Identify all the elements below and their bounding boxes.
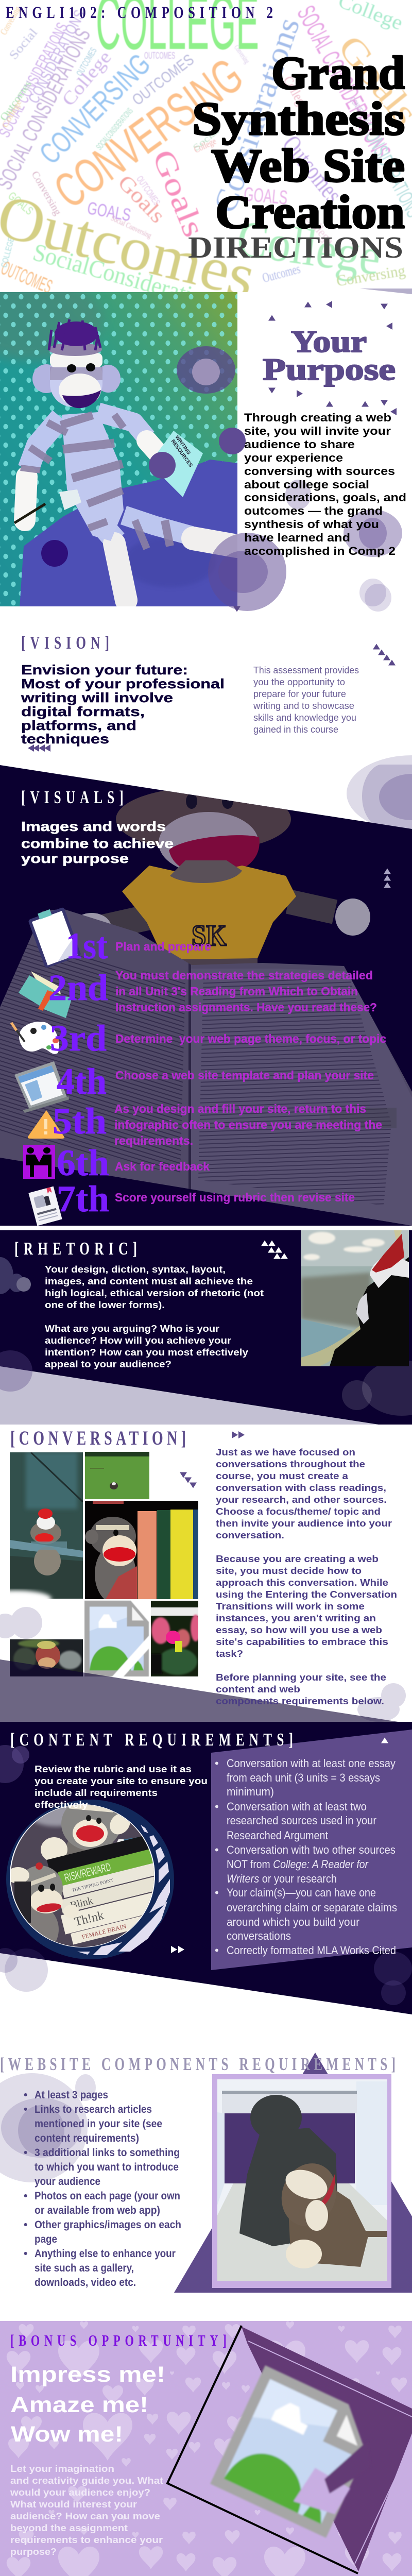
serif words in the cloud: Conversing	[29, 169, 63, 217]
photo: monkey on bookshelf	[85, 1501, 198, 1604]
section label: vision: [VISION]	[21, 633, 109, 653]
hands	[335, 899, 370, 936]
text block: conversation: your research, and other sources.	[216, 1495, 387, 1505]
ears	[32, 364, 53, 393]
step 7: score with rubric	[28, 1178, 355, 1226]
word cloud background: CONVERSING	[33, 47, 157, 171]
tag	[59, 489, 81, 510]
text block: rubric: you create your site to ensure you	[35, 1776, 208, 1786]
books stack: FEMALE BRAIN	[81, 1923, 127, 1941]
text block: vision note: This assessment provides	[253, 665, 359, 675]
bullet list: website components: •	[24, 2248, 27, 2260]
bullet list: content requirements: overarching claim or separate claims	[227, 1901, 397, 1914]
text block: purpose statement: audience to share	[244, 438, 355, 451]
step 7: score with rubric: 7th	[57, 1178, 109, 1219]
text block: purpose statement: your experience	[244, 451, 343, 464]
icon: clipboard	[27, 905, 81, 969]
shirt logo: SK	[192, 919, 227, 952]
serif words in the cloud: College	[281, 74, 312, 112]
text block: rubric	[35, 1764, 208, 1810]
text block: conversation: then invite your audience into your	[216, 1518, 392, 1529]
text block: purpose statement: outcomes — the grand	[244, 504, 383, 517]
text block: conversation	[216, 1447, 397, 1706]
bullet list: website components: Anything else to enhance your	[35, 2248, 176, 2260]
head	[50, 366, 102, 407]
heading: envision your future: writing will involve	[21, 690, 173, 705]
books stack: Blink	[69, 1895, 94, 1911]
text block: rhetoric: images, and content must all achieve the	[45, 1276, 253, 1286]
panel: visuals	[0, 765, 412, 1231]
text block: conversation: task?	[216, 1649, 243, 1659]
heading: impress amaze wow: Wow me!	[11, 2422, 123, 2447]
heading: your purpose: Purpose	[263, 352, 396, 386]
photo: monkey with open book	[0, 787, 412, 1231]
step 2: demonstrate strategies: in all Unit 3's Reading from Which to Obtain	[115, 985, 358, 998]
text block: vision note: you the opportunity to	[253, 677, 345, 687]
serif words in the cloud	[0, 0, 412, 317]
serif words in the cloud: Social Conversing	[110, 214, 153, 240]
step 3: determine theme: Determine your web page theme, focus, or topic	[115, 1032, 386, 1045]
bullet list: content requirements: •	[215, 1757, 219, 1770]
text block: purpose statement: synthesis of what you	[244, 518, 379, 531]
stripes	[21, 415, 170, 549]
icon: descending triangles	[373, 644, 396, 666]
word cloud background: GOALS	[6, 189, 36, 217]
sock body	[182, 958, 258, 965]
panel: header word cloud	[0, 0, 412, 317]
photo ring with stripes	[6, 1800, 174, 1959]
word cloud background: OUTCOMES	[74, 46, 99, 78]
text block: vision note	[253, 665, 359, 735]
serif words in the cloud: Social	[191, 125, 221, 153]
decorative circles: purpose	[41, 346, 402, 612]
left arm	[28, 417, 61, 469]
text block: conversation: conversation.	[216, 1530, 284, 1540]
text block: conversation: Choose a focus/theme/ topic and	[216, 1506, 381, 1517]
hat and hair	[48, 343, 102, 356]
text block: conversation: conversations throughout the	[216, 1459, 365, 1469]
serif words in the cloud: Goals	[330, 28, 412, 133]
text block: bonus: What would interest your	[10, 2499, 137, 2510]
photo: monkeys with books	[7, 1795, 196, 1954]
bullet list: website components: page	[35, 2233, 57, 2245]
text block: bonus: would your audience enjoy?	[10, 2487, 150, 2498]
bullet list: website components: •	[24, 2147, 27, 2159]
step 6: ask for feedback: Ask for feedback	[115, 1160, 210, 1173]
heading: images and words: your purpose	[21, 851, 129, 866]
text block: purpose statement: accomplished in Comp 2	[244, 545, 396, 557]
bullet list: website components: At least 3 pages	[35, 2089, 108, 2101]
bullet list: website components: content requirements)	[35, 2132, 139, 2144]
text block: bonus	[10, 2464, 163, 2557]
text block: conversation: course, you must create a	[216, 1471, 349, 1481]
serif words in the cloud: College	[58, 47, 115, 110]
panel: website components	[0, 2053, 412, 2293]
serif words in the cloud: SocialConsiderations	[30, 239, 226, 317]
word cloud background: OUTCOMES	[134, 174, 162, 207]
text block: rubric: include all requirements	[35, 1788, 158, 1798]
decorative triangles	[171, 1737, 388, 1953]
step 2: demonstrate strategies	[19, 967, 377, 1018]
photo: sock monkey on batik: WRITING	[174, 434, 192, 456]
photo: sock monkey on batik: RESOURCES	[170, 438, 194, 468]
text block: bonus: requirements to enhance your	[10, 2535, 163, 2545]
monkey head	[116, 790, 291, 846]
step 3: determine theme	[11, 1018, 386, 1059]
tilted frame	[167, 2326, 412, 2573]
step 5: return to infographic: As you design and fill your site, return to this	[114, 1102, 366, 1115]
subtitle: directions: DIRECTIONS	[188, 230, 403, 264]
text block: rhetoric: appeal to your audience?	[45, 1359, 171, 1369]
decorative circles	[0, 2073, 96, 2182]
text block: conversation: site's capabilities to embrace this	[216, 1637, 388, 1647]
decorative circles: conversation	[0, 1607, 406, 1722]
bullet list: content requirements: •	[215, 1800, 219, 1813]
icon: scattered triangles around your purpose	[233, 301, 397, 612]
serif words in the cloud: Outcomes	[277, 130, 348, 208]
step 1: plan and prepare: Plan and prepare	[115, 940, 211, 953]
text block: purpose statement: site, you will invite your	[244, 425, 391, 437]
book	[158, 431, 203, 497]
text block: bonus: audience? How can you move	[10, 2511, 160, 2521]
bullet list: content requirements: Researched Argument	[227, 1829, 328, 1842]
step 3: determine theme: 3rd	[50, 1018, 107, 1059]
text block: purpose statement: about college social	[244, 478, 369, 491]
section label: bonus opportunity: [BONUS OPPORTUNITY]	[10, 2331, 227, 2349]
text block: conversation: site, you must decide how to	[216, 1566, 362, 1576]
decorative wedge under header	[360, 289, 412, 294]
monkey silhouette	[330, 1257, 409, 1366]
text block: rhetoric: intention? How can you most effectively	[45, 1347, 248, 1358]
word cloud background: OUTCOMES	[0, 257, 55, 298]
step 5: return to infographic: infographic often to ensure you are meeting the	[114, 1118, 382, 1131]
books stack: RISK/REWARD	[63, 1860, 112, 1884]
text block: rhetoric: high logical, ethical version of rhetoric (not	[45, 1288, 264, 1298]
word cloud background: OUTCOMES	[144, 50, 175, 61]
heading: envision your future: Most of your professional	[21, 676, 225, 691]
text block: vision note: skills and knowledge you	[253, 713, 356, 723]
arms	[103, 917, 149, 927]
icon: descending triangles	[180, 1472, 197, 1488]
text block: conversation: conversation with class readings,	[216, 1483, 386, 1493]
icon: left triangles	[28, 744, 50, 752]
sock monkey	[273, 2156, 387, 2268]
main title: Grand	[271, 47, 405, 99]
bullet list: content requirements	[215, 1757, 397, 1957]
heading: envision your future	[21, 662, 225, 747]
bullet list: website components: your audience	[35, 2176, 100, 2188]
panel: bonus opportunity	[0, 2321, 412, 2576]
icon: book	[19, 971, 72, 1018]
decorative triangles	[384, 869, 391, 888]
word cloud background: CONVERSING	[348, 96, 373, 126]
photo frame	[212, 2074, 391, 2288]
bullet list: website components: downloads, video etc.	[35, 2277, 136, 2289]
step 7: score with rubric: Score yourself using rubric then revise site	[115, 1191, 355, 1204]
bullet list: content requirements: Your claim(s)—you can have one	[227, 1886, 376, 1899]
photo: monkey with statue	[217, 2079, 387, 2281]
bullet list: website components: mentioned in your site (see	[35, 2118, 162, 2130]
serif words in the cloud: Considerations	[207, 13, 306, 217]
bullet list: website components: •	[24, 2104, 27, 2115]
bullet list: content requirements: researched sources used in your	[227, 1814, 376, 1827]
heading: images and words: combine to achieve	[21, 836, 174, 851]
section label: rhetoric: [RHETORIC]	[14, 1239, 137, 1259]
icon: warning triangle	[28, 1110, 64, 1139]
text block: conversation: Transitions will work in some	[216, 1601, 365, 1612]
panel: content requirements	[0, 1722, 412, 2014]
heading: images and words: Images and words	[21, 819, 166, 834]
icon: palette	[11, 1022, 59, 1054]
step 4: choose template: Choose a web site template and plan your site	[115, 1069, 374, 1082]
text block: purpose statement	[244, 411, 406, 557]
muzzle and mouth	[59, 374, 101, 403]
step 5: return to infographic: requirements.	[114, 1134, 193, 1147]
bullet list: website components: •	[24, 2089, 27, 2101]
panel: rhetoric	[0, 1230, 412, 1425]
step 1: plan and prepare: 1st	[66, 925, 108, 967]
text block: conversation: essay, so how will you use a web	[216, 1625, 382, 1635]
photo: monkey among flowers	[151, 1601, 201, 1676]
bullet list: content requirements: conversations	[227, 1929, 291, 1942]
serif words in the cloud: College	[1, 98, 24, 129]
bullet list: website components: Links to research articles	[35, 2104, 152, 2115]
text block: bonus: beyond the assignment	[10, 2523, 128, 2533]
bullet list: website components: 3 additional links to something	[35, 2147, 180, 2159]
bullet list: website components: Photos on each page (your own	[35, 2190, 180, 2202]
photo collage: conversation	[0, 1452, 201, 1676]
purple panel	[211, 1730, 412, 1970]
step 6: ask for feedback	[23, 1142, 210, 1183]
serif words in the cloud: Conversing	[232, 44, 251, 65]
photo: view from plane window	[301, 1230, 409, 1366]
step 5: return to infographic: 5th	[53, 1100, 107, 1142]
heading: your purpose: Your	[291, 325, 367, 359]
bullet list: content requirements: around which you build your	[227, 1916, 359, 1928]
decorative slate wedge	[0, 1659, 398, 1722]
photo: sock monkey on batik	[0, 278, 237, 608]
word cloud background: GOALS	[243, 183, 288, 209]
photo: broken image placeholder	[84, 1601, 149, 1676]
step 2: demonstrate strategies: 2nd	[48, 967, 108, 1008]
bullet list: website components	[24, 2089, 181, 2289]
text block: bonus: Let your imagination	[10, 2464, 114, 2474]
serif words in the cloud: College	[192, 135, 218, 155]
main title: Web Site	[211, 140, 405, 192]
text block: bonus: purpose?	[10, 2547, 57, 2557]
bullet list: website components: Other graphics/images on each	[35, 2219, 181, 2231]
step 4: choose template	[14, 1061, 374, 1113]
big purple triangle	[174, 2053, 412, 2293]
decorative circles	[0, 1257, 412, 1416]
bullet list: content requirements: Conversation with at least two	[227, 1800, 367, 1813]
icon: handshake	[23, 1145, 55, 1179]
text block: rhetoric: audience? How will you achieve your	[45, 1335, 231, 1346]
serif words in the cloud: Goals	[113, 171, 169, 228]
heading: impress amaze wow: Amaze me!	[10, 2393, 148, 2417]
serif words in the cloud: College	[302, 211, 337, 248]
bullet list: content requirements: Correctly formatted MLA Works Cited	[227, 1944, 396, 1957]
serif words in the cloud: College	[234, 209, 384, 286]
text block: purpose statement: Through creating a web	[244, 411, 391, 424]
right arm	[98, 412, 147, 438]
blue cushion	[20, 460, 237, 608]
step 2: demonstrate strategies: You must demonstrate the strategies detailed	[115, 969, 373, 982]
word cloud background: SOCIALCONSIDERATIONS	[94, 106, 135, 152]
step 4: choose template: 4th	[57, 1061, 107, 1102]
eyes	[67, 364, 76, 372]
word cloud background	[0, 0, 412, 298]
step 1: plan and prepare	[27, 905, 211, 969]
text block: conversation: components requirements below.	[216, 1696, 384, 1706]
text block: rhetoric: Your design, diction, syntax, layout,	[45, 1264, 226, 1275]
heading: images and words	[21, 819, 174, 866]
bullet list: content requirements: Writers or your research	[227, 1872, 337, 1885]
legs	[124, 515, 192, 536]
bullet list: website components: •	[24, 2219, 27, 2231]
serif words in the cloud: Goals	[146, 145, 212, 242]
text block: rhetoric: one of the lower forms).	[45, 1300, 165, 1310]
decorative circles behind visuals edge	[347, 755, 412, 832]
bullet list: website components: •	[24, 2190, 27, 2202]
text block: vision note: prepare for your future	[253, 689, 346, 699]
bullet list: content requirements: •	[215, 1886, 219, 1899]
photo: monkey in plants	[10, 1639, 83, 1676]
text block: vision note: gained in this course	[253, 724, 338, 735]
bullet list: content requirements: Conversation with at least one essay	[227, 1757, 396, 1770]
heading: impress amaze wow	[10, 2362, 165, 2447]
heading: envision your future: platforms, and	[21, 718, 136, 733]
text block: purpose statement: have learned and	[244, 531, 350, 544]
text block: rhetoric: What are you arguing? Who is your	[45, 1324, 219, 1334]
serif words in the cloud: Social	[7, 26, 40, 62]
heading: envision your future: techniques	[21, 731, 109, 747]
text block: rubric: Review the rubric and use it as	[35, 1764, 192, 1774]
text block: conversation: Because you are creating a web	[216, 1554, 379, 1564]
bullet list: website components: site such as a gallery,	[35, 2262, 134, 2274]
serif words in the cloud: Conversing	[335, 262, 406, 290]
text block: conversation: approach this conversation. While	[216, 1578, 388, 1588]
bullet list: content requirements: NOT from College: A Reader for	[227, 1858, 369, 1871]
text block: purpose statement: considerations, goals, and	[244, 491, 406, 504]
text block: conversation: Just as we have focused on	[216, 1447, 355, 1458]
bullet list: content requirements: from each unit (3 units = 3 essays	[227, 1771, 380, 1784]
bullet list: website components: or available from web app)	[35, 2205, 160, 2216]
main title	[192, 47, 405, 238]
course label: ENGLI102: COMPOSITION 2	[6, 4, 273, 22]
word cloud background: OUTCOMES	[129, 51, 197, 109]
heading: envision your future: Envision your future:	[21, 662, 188, 677]
step 6: ask for feedback: 6th	[57, 1142, 109, 1183]
bullet list: content requirements: •	[215, 1944, 219, 1957]
image: blurred placeholder in frame	[210, 2365, 381, 2538]
photo: monkey in car seat	[10, 1452, 83, 1599]
step 2: demonstrate strategies: Instruction assignments. Have you read these?	[115, 1001, 377, 1014]
section label: content requirements: [CONTENT REQUIREMENTS]	[10, 1730, 293, 1750]
text block: conversation: using the Entering the Conversation	[216, 1589, 397, 1600]
front monkey	[13, 1905, 59, 1954]
text block: vision note: writing and to showcase	[253, 701, 354, 711]
word cloud background: GOALS	[86, 198, 132, 225]
bullet list: content requirements: •	[215, 1843, 219, 1856]
torso	[62, 412, 124, 541]
word cloud background: COLLEGE	[0, 236, 16, 268]
heading: impress amaze wow: Impress me!	[10, 2362, 165, 2387]
heading: your purpose	[263, 325, 396, 386]
bullet list: content requirements: minimum)	[227, 1785, 274, 1798]
text block: rhetoric	[45, 1264, 264, 1369]
text block: conversation: instances, you aren't writing an	[216, 1613, 376, 1623]
heading: envision your future: digital formats,	[21, 704, 145, 719]
bullet list: website components: to which you want to introduce	[35, 2161, 179, 2173]
text block: conversation: Before planning your site, see the	[216, 1672, 386, 1683]
icon: right triangles	[232, 1431, 245, 1438]
photo: monkey on grass	[85, 1452, 149, 1499]
decorative circles	[0, 1745, 412, 2005]
books stack	[47, 1828, 196, 1946]
main title: Synthesis	[192, 93, 405, 145]
step 5: return to infographic	[28, 1100, 382, 1147]
text block: rubric: effectively	[35, 1800, 88, 1810]
books stack: THE TIPPING POINT	[71, 1877, 114, 1893]
icon: laptop	[14, 1061, 69, 1113]
serif words in the cloud: Outcomes	[261, 261, 302, 285]
decorative triangles	[261, 1241, 288, 1259]
icon: thumbs up document	[28, 1187, 62, 1226]
main title: Creation	[215, 186, 405, 238]
text block: bonus: and creativity guide you. What	[10, 2476, 163, 2486]
section label: visuals: [VISUALS]	[21, 787, 124, 807]
open book	[0, 907, 412, 1231]
bullet list: content requirements: Conversation with two other sources	[227, 1843, 396, 1856]
yellow shirt	[122, 866, 296, 961]
section label: website components requirements: [WEBSITE COMPONENTS REQUIREMENTS]	[0, 2054, 396, 2074]
pencil	[14, 504, 45, 523]
text block: conversation: content and web	[216, 1684, 300, 1694]
statue	[239, 2095, 337, 2246]
section label: conversation: [CONVERSATION]	[10, 1428, 186, 1449]
books stack: Th!nk	[73, 1909, 105, 1929]
text block: purpose statement: conversing with sources	[244, 465, 395, 478]
